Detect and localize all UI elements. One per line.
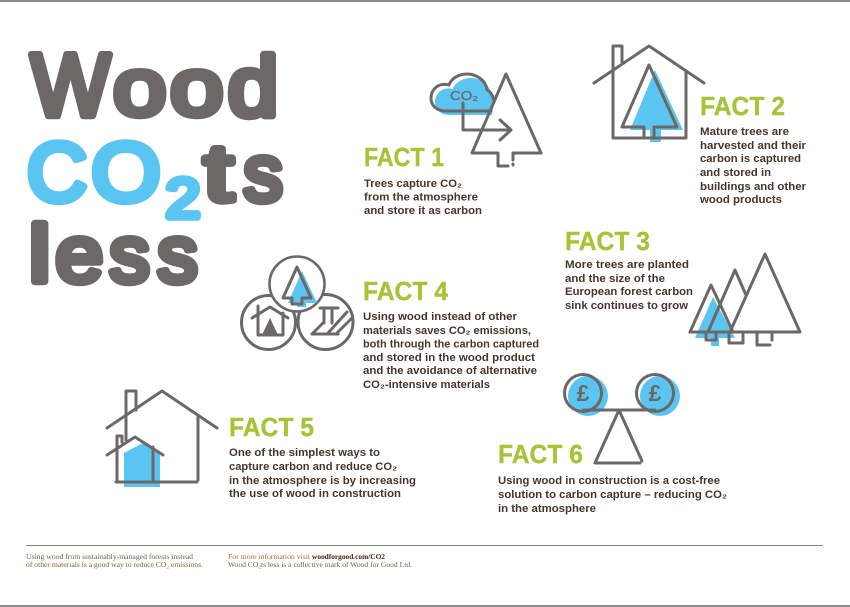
icon: cloud and tree with arrow xyxy=(431,74,541,166)
fact 5 text: in the atmosphere is by increasing xyxy=(229,475,416,487)
icon: balance scale with pound coins: £ xyxy=(649,380,662,406)
footer note: right: Wood CO₂ts less is a collective mark of Wood for Good Ltd. xyxy=(228,561,412,569)
fact 4 text: CO₂-intensive materials xyxy=(363,379,490,391)
fact 2 text: buildings and other xyxy=(700,181,807,193)
title: Wood CO2ts less: W xyxy=(31,37,110,135)
title: Wood CO2ts less: l xyxy=(29,209,50,299)
fact 3 text: European forest carbon xyxy=(565,286,693,298)
footer note: right: For more information visit xyxy=(228,553,310,561)
icon: balance scale with pound coins: £ xyxy=(577,380,590,406)
fact 4 text: both through the carbon captured xyxy=(363,338,539,350)
footer note: right: woodforgood.com/CO2 xyxy=(312,553,385,561)
fact 6 text: solution to carbon capture – reducing CO₂ xyxy=(498,489,727,501)
fact 5 text: capture carbon and reduce CO₂ xyxy=(229,461,397,473)
icon: three trees xyxy=(690,254,800,346)
fact 5 text: One of the simplest ways to xyxy=(229,447,380,459)
title: Wood CO2ts less: o xyxy=(114,42,166,132)
title: Wood CO2ts less: O xyxy=(92,126,161,219)
fact 1 text xyxy=(364,142,482,217)
fact 2 text: and stored in xyxy=(700,167,771,179)
fact 5 text xyxy=(229,412,416,500)
icon: houses xyxy=(107,391,217,487)
fact 5 text: FACT 5 xyxy=(229,412,314,442)
title: Wood CO2ts less xyxy=(27,37,283,299)
fact 2 text: FACT 2 xyxy=(700,91,785,121)
fact 4 text: Using wood instead of other xyxy=(363,311,518,323)
fact 2 text xyxy=(699,91,807,206)
title: Wood CO2ts less: s xyxy=(110,210,150,298)
icon: cloud and tree with arrow: CO₂ xyxy=(450,88,478,103)
fact 1 text: FACT 1 xyxy=(364,142,444,172)
fact 1 text: from the atmosphere xyxy=(364,192,478,204)
fact 3 text: and the size of the xyxy=(565,273,665,285)
fact 4 text: materials saves CO₂ emissions, xyxy=(363,325,531,337)
footer note: right xyxy=(228,553,412,569)
fact 2 text: harvested and their xyxy=(700,140,807,152)
fact 4 text: and stored in the wood product xyxy=(363,352,535,364)
fact 3 text: FACT 3 xyxy=(565,226,650,256)
title: Wood CO2ts less: t xyxy=(204,128,233,218)
fact 4 text: FACT 4 xyxy=(363,276,449,306)
title: Wood CO2ts less: d xyxy=(228,40,278,134)
footer note: left: Using wood from sustainably-managed forests instead xyxy=(26,553,193,561)
fact 2 text: carbon is captured xyxy=(700,153,801,165)
title: Wood CO2ts less: s xyxy=(158,210,198,298)
icon: balance scale with pound coins xyxy=(564,374,680,463)
title: Wood CO2ts less: C xyxy=(27,126,87,218)
title: Wood CO2ts less: 2 xyxy=(166,167,200,230)
title: Wood CO2ts less: e xyxy=(56,209,103,299)
fact 3 text: sink continues to grow xyxy=(565,300,689,312)
fact 6 text xyxy=(498,439,727,515)
footer note: left xyxy=(26,553,203,569)
fact 5 text: the use of wood in construction xyxy=(229,488,401,500)
title: Wood CO2ts less: s xyxy=(244,128,283,218)
fact 1 text: Trees capture CO₂ xyxy=(364,178,462,190)
footer note: left: of other materials is a good way to reduce CO₂ emissions. xyxy=(26,561,203,569)
fact 2 text: wood products xyxy=(699,194,782,206)
fact 6 text: Using wood in construction is a cost-free xyxy=(498,475,720,487)
fact 2 text: Mature trees are xyxy=(700,126,789,138)
fact 4 text: and the avoidance of alternative xyxy=(363,365,537,377)
fact 1 text: and store it as carbon xyxy=(364,205,482,217)
fact 6 text: FACT 6 xyxy=(498,439,583,469)
title: Wood CO2ts less: o xyxy=(170,42,223,132)
fact 6 text: in the atmosphere xyxy=(498,503,596,515)
icon: three circles with tree, house and timber xyxy=(242,256,353,350)
fact 3 text xyxy=(565,226,693,312)
fact 3 text: More trees are planted xyxy=(565,259,689,271)
icon: house with tree xyxy=(594,46,704,142)
fact 4 text xyxy=(363,276,539,391)
